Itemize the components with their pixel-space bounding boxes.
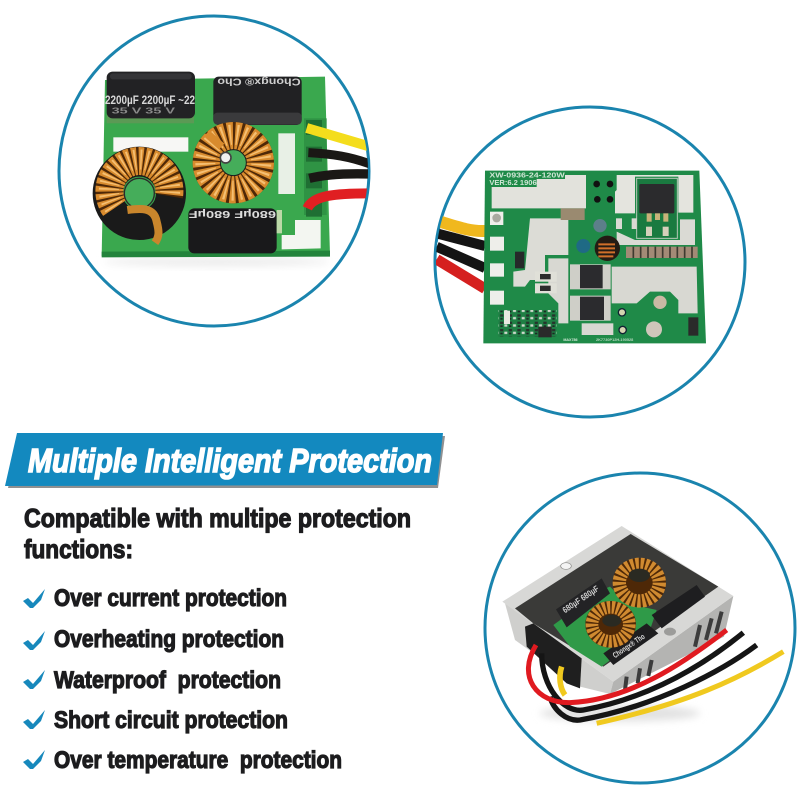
item: short circuit: Short circuit protection: [54, 707, 288, 734]
protection list: [23, 585, 342, 774]
photo circle: green control board: [435, 107, 745, 417]
wires: [307, 128, 370, 147]
photo circle: filter board with toroid coils: 35 V 35 V: [112, 105, 175, 115]
photo circle: filter board with toroid coils: Chongx® Cho: [217, 76, 301, 87]
coil left: [108, 162, 171, 225]
item: over temperature: Over temperature protection: [54, 747, 342, 774]
item: over current: Over current protection: [54, 585, 287, 612]
banner: Multiple Intelligent Protection: Multiple Intelligent Protection: [28, 442, 432, 479]
coils: [613, 558, 666, 607]
coil right: [207, 136, 260, 189]
photo circle: aluminium housed converter: 680µF 680µF: [561, 583, 601, 615]
item: waterproof: Waterproof protection: [54, 667, 281, 694]
banner: Multiple Intelligent Protection: [5, 433, 445, 488]
photo circle: filter board with toroid coils: 2200µF 2200µF ~22: [105, 93, 195, 107]
intro text: [24, 503, 411, 564]
wires: [597, 652, 783, 723]
intro text: functions:: [24, 534, 133, 564]
photo circle: green control board: XW-0936-24-120W: [489, 173, 565, 180]
photo circle: green control board: 2K7730P12H-190528: [596, 338, 633, 342]
photo circle: aluminium housed converter: [485, 473, 795, 783]
capacitors: [556, 578, 610, 627]
plug: [525, 623, 582, 688]
item: overheating: Overheating protection: [54, 626, 284, 653]
photo circle: green control board: MAX786: [563, 338, 578, 342]
photo circle: filter board with toroid coils: [59, 16, 370, 326]
intro text: Compatible with multipe protection: [24, 503, 411, 533]
photo circle: green control board: VER:6.2 1906: [489, 180, 537, 187]
photo circle: filter board with toroid coils: 680µF 680µF: [189, 208, 276, 219]
photo circle: aluminium housed converter: Chongx® Tho: [611, 632, 647, 660]
